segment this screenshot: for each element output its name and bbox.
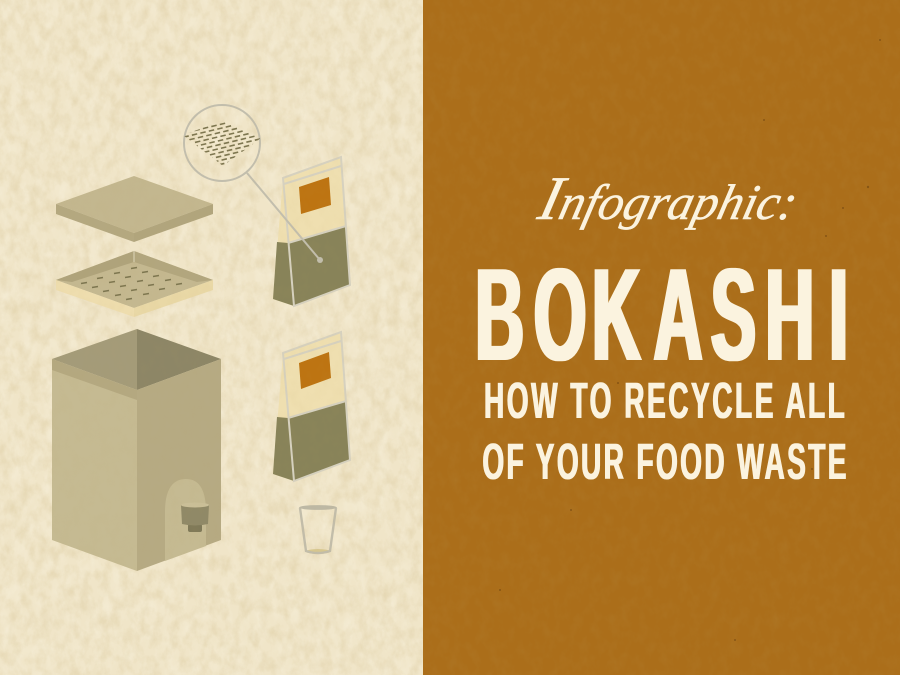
subtitle line 1: HOW TO RECYCLE ALL [484, 372, 845, 429]
amber paper texture overlay [423, 0, 900, 675]
panel: amber background right [423, 0, 900, 675]
icon: bokashi bag with magnifier [273, 157, 350, 306]
bucket tap [181, 502, 209, 532]
callout: magnifier circle showing bran texture [180, 105, 323, 263]
icon: second bokashi bag [273, 332, 350, 481]
heading: Infographic: Infographic: [532, 164, 806, 233]
tray holes [81, 268, 182, 300]
bucket tap recess [165, 479, 206, 561]
panel: paper background left [0, 0, 423, 675]
subtle paper texture over illustrations [0, 0, 423, 675]
icon: bucket lid [56, 176, 213, 242]
subtitle line 2: OF YOUR FOOD WASTE [482, 433, 846, 490]
icon: bokashi bucket [52, 329, 221, 571]
icon: perforated drainage tray [56, 251, 213, 317]
paper highlight on background [0, 0, 423, 675]
paper texture on background [0, 0, 423, 675]
title: BOKASHI: BOKASHI [475, 242, 848, 389]
dark specks on amber panel [499, 39, 881, 641]
icon: collection cup [299, 505, 337, 554]
